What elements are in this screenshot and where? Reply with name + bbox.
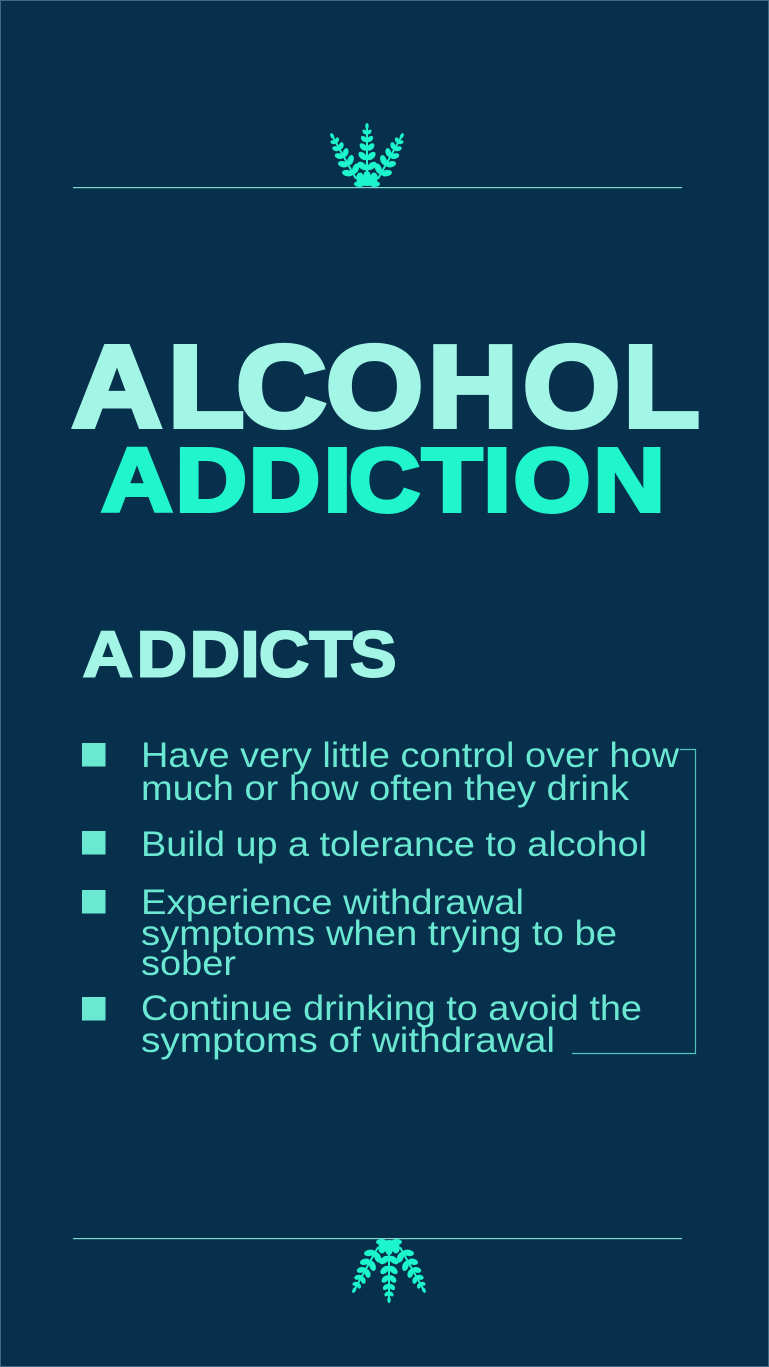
bullet 2 [82, 831, 106, 854]
text: item 4: symptoms of withdrawal [141, 1021, 555, 1060]
text: item 1: Have very little control over how [141, 736, 680, 775]
text: item 3: Experience withdrawal [141, 883, 524, 922]
bullet 1 [82, 743, 106, 766]
bottom divider line [73, 1238, 682, 1239]
icon: bottom plant sprigs [343, 1239, 435, 1303]
title line: ALCOHOL: ALCOHOL [72, 322, 700, 451]
text: item 1: much or how often they drink [141, 769, 630, 808]
title line: ADDICTION: ADDICTION [101, 430, 665, 531]
list of addict behaviours [82, 736, 680, 1060]
text: item 3: sober [141, 944, 236, 983]
heading: addicts: ADDICTS [83, 619, 397, 691]
text: item 3 [141, 883, 617, 983]
bracket outline around list [572, 750, 696, 1054]
title [72, 322, 700, 531]
text: item 3: symptoms when trying to be [141, 914, 617, 953]
bullet 4 [82, 997, 106, 1020]
bullet 3 [82, 890, 106, 914]
text: item 4 [141, 989, 642, 1060]
top divider line [73, 187, 682, 188]
text: item 2: Build up a tolerance to alcohol [141, 825, 647, 864]
text: item 4: Continue drinking to avoid the [141, 989, 642, 1028]
icon: top plant sprigs [321, 123, 413, 187]
text: item 1 [141, 736, 680, 808]
